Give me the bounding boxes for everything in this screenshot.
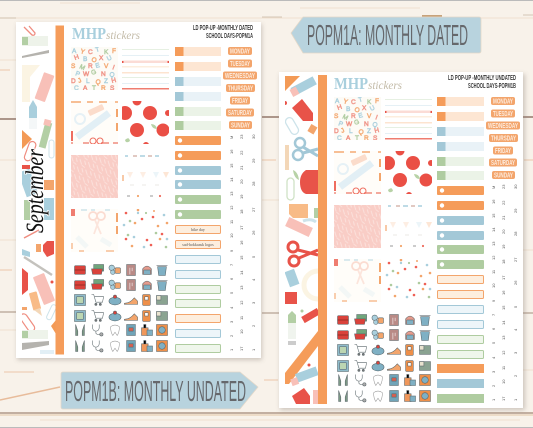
sheet 1 date numbers: 3 — [229, 320, 234, 323]
sheet 2 date numbers: 3 — [513, 351, 518, 354]
sheet 1 date numbers: 13 — [229, 191, 234, 196]
sheet 1 date numbers — [229, 134, 256, 351]
sheet 1 date numbers: 17 — [239, 346, 244, 351]
sheet 1 date numbers: 7 — [229, 263, 234, 266]
sheet 1 date numbers: 3 — [251, 301, 256, 304]
sheet 1 weekday labels: SATURDAY — [228, 110, 252, 117]
sheet 1 date numbers: 15 — [229, 163, 234, 168]
sheet 1 date numbers: 11 — [239, 315, 244, 320]
sheet 1 date numbers: 1 — [229, 348, 234, 351]
sheet 1 date numbers: 5 — [229, 291, 234, 294]
sheet 2 date numbers — [491, 184, 518, 401]
sheet 1 date numbers: 20 — [239, 179, 244, 184]
sheet 1 logo — [72, 24, 140, 43]
sheet 2 date numbers: 2 — [491, 384, 496, 387]
sheet 1 pattern tiles — [71, 46, 171, 252]
sheet 1 date numbers: 16 — [229, 149, 234, 154]
sheet 2 date numbers: 23 — [501, 184, 506, 189]
sheet 1 header text — [193, 25, 253, 40]
sheet 2 weekday labels: TUESDAY — [493, 111, 513, 118]
sheet 2 date numbers: 17 — [501, 396, 506, 401]
sheet 2 date numbers: 13 — [501, 335, 506, 340]
sheet 2 weekday labels: SUNDAY — [494, 172, 513, 180]
sheet 2 date numbers: 1 — [491, 398, 496, 401]
sheet 2 date numbers: 10 — [501, 379, 506, 384]
sheet 1 dot bars — [175, 136, 221, 219]
sheet 2 date numbers: 20 — [501, 229, 506, 234]
sheet 2 date numbers: 29 — [513, 208, 518, 213]
sheet 1 weekday labels — [223, 47, 257, 130]
sheet 2 date numbers: 7 — [491, 313, 496, 316]
sheet 1 date numbers: 14 — [229, 177, 234, 182]
sheet 1 date numbers: 19 — [239, 194, 244, 199]
sheet 1 date numbers: 10 — [229, 233, 234, 238]
sheet 1 weekday labels: MONDAY — [230, 48, 250, 56]
sheet 1 half-tab stickers — [175, 47, 221, 130]
sheet 2 date numbers: 15 — [491, 213, 496, 218]
sheet 1 date numbers: 1 — [251, 348, 256, 351]
sheet 2 weekday labels — [486, 97, 520, 180]
sheet 1 outlined boxes: sad-hokkaask logos — [182, 242, 214, 247]
sheet 1 date numbers: 27 — [251, 207, 256, 212]
sheet 1 weekday labels: TUESDAY — [230, 61, 250, 68]
sheet 2 date numbers: 18 — [501, 259, 506, 264]
sheet 1 date numbers: 4 — [251, 278, 256, 281]
sheet 2 icon grid — [338, 314, 430, 402]
sheet 1 icon grid — [74, 264, 168, 352]
sheet 1 date numbers: 12 — [239, 300, 244, 305]
sheet 2 date numbers: 14 — [491, 227, 496, 232]
sheet 2 date numbers: 12 — [491, 255, 496, 260]
sheet 2 date numbers: 2 — [513, 374, 518, 377]
sheet 2 dot bars — [437, 186, 484, 269]
sheet 1: monthly dated — [16, 22, 262, 360]
sheet 2 half-tab stickers — [437, 97, 484, 180]
sheet 1 date numbers: 28 — [251, 181, 256, 186]
sheet 1 date numbers: 17 — [239, 225, 244, 230]
sheet 1 date numbers: 21 — [239, 165, 244, 170]
sheet 2 side art — [285, 76, 318, 404]
sheet 1 header text: LD POP-UP -MONTHLY DATED — [193, 25, 253, 32]
sheet 2 date numbers: 30 — [513, 184, 518, 189]
sheet 1 date numbers: 11 — [229, 219, 234, 224]
sheet 2 date numbers: 4 — [513, 328, 518, 331]
sheet 2 date numbers: 6 — [491, 327, 496, 330]
sheet 2 date numbers: 10 — [491, 283, 496, 288]
sheet 2 date numbers: 15 — [501, 305, 506, 310]
sheet 2 date numbers: 16 — [491, 199, 496, 204]
sheet 1 outlined boxes — [176, 226, 220, 352]
sheet 1 outlined boxes: bike day — [191, 227, 205, 232]
sheet 2 date numbers: 22 — [501, 200, 506, 205]
sheet 1 date numbers: 6 — [229, 277, 234, 280]
sheet 1 date numbers: M — [229, 136, 234, 139]
sheet 1 date numbers: 10 — [239, 329, 244, 334]
label: POPM1A monthly dated — [291, 17, 481, 53]
sheet 1 date numbers: 2 — [229, 334, 234, 337]
sheet 1 date numbers: 9 — [229, 249, 234, 252]
sheet 1 logo: stickers — [106, 28, 140, 42]
sheet 1 September script: September — [22, 149, 49, 233]
sheet 2 date numbers: 11 — [501, 365, 506, 370]
sheet 2 date numbers: 4 — [491, 356, 496, 359]
sheet 1 date numbers: 18 — [239, 209, 244, 214]
sheet 2 date numbers: 1 — [513, 398, 518, 401]
sheet 2 weekday labels: THURSDAY — [491, 136, 516, 142]
sheet 1 header text: SCHOOL DAYS-POPM1A — [206, 33, 253, 40]
sheet 1 date numbers: 16 — [239, 240, 244, 245]
sheet 2 date numbers: 5 — [513, 305, 518, 308]
sheet 2 date numbers: 5 — [491, 341, 496, 344]
sheet 1 orange spine — [56, 26, 64, 354]
sheet 2 date numbers: 17 — [501, 275, 506, 280]
sheet 1 date numbers: 30 — [251, 134, 256, 139]
sheet 2 logo: stickers — [368, 78, 402, 92]
sheet 2 date numbers: 28 — [513, 231, 518, 236]
sheet 2 logo: MHP — [334, 74, 368, 93]
sheet 1 date numbers: 2 — [251, 324, 256, 327]
sheet 2 orange spine — [318, 75, 327, 404]
sheet 2 date numbers: 16 — [501, 290, 506, 295]
sheet 1 date numbers: 4 — [229, 306, 234, 309]
sheet 2 date numbers: 9 — [491, 299, 496, 302]
sheet 2: monthly undated — [279, 72, 525, 410]
sheet 1 date numbers: 23 — [239, 134, 244, 139]
sheet 1 weekday labels: WEDNESDAY — [225, 73, 255, 80]
sheet 1 date numbers: 5 — [251, 255, 256, 258]
sheet 2 date numbers: 13 — [491, 241, 496, 246]
sheet 1 weekday labels: THURSDAY — [228, 86, 253, 92]
label: POPM1B monthly undated — [61, 372, 258, 409]
sheet 2 date numbers: 3 — [491, 370, 496, 373]
sheet 2 date numbers: 12 — [501, 350, 506, 355]
sheet 2 logo — [334, 74, 402, 93]
sheet 2 outlined boxes and solid bars — [437, 276, 484, 403]
sheet 1 date numbers: 22 — [239, 150, 244, 155]
sheet 2 pattern tiles — [334, 96, 434, 302]
sheet 2 date numbers: 11 — [491, 269, 496, 274]
sheet 2 weekday labels: SATURDAY — [491, 160, 515, 167]
sheet 2 weekday labels: WEDNESDAY — [488, 123, 518, 130]
sheet 2 weekday labels: FRIDAY — [495, 148, 511, 155]
sheet 2 date numbers: 26 — [513, 280, 518, 285]
sheet 1 weekday labels: SUNDAY — [231, 122, 250, 130]
sheet 2 weekday labels: MONDAY — [493, 98, 513, 106]
sheet 2 header text — [448, 75, 516, 90]
sheet 2 date numbers: M — [491, 186, 496, 189]
sheet 2 date numbers: 27 — [513, 257, 518, 262]
text: POPM1B: MONTHLY UNDATED — [65, 376, 246, 408]
sheet 1 date numbers: 26 — [251, 230, 256, 235]
sheet 2 date numbers: 21 — [501, 215, 506, 220]
sheet 1 date numbers: 13 — [239, 285, 244, 290]
sheet 1 side art — [22, 26, 56, 354]
sheet 1 logo: MHP — [72, 24, 106, 43]
sheet 1 weekday labels: FRIDAY — [232, 98, 248, 105]
sheet 1 date numbers: 29 — [251, 158, 256, 163]
sheet 2 date numbers: 14 — [501, 320, 506, 325]
sheet 1 date numbers: 12 — [229, 205, 234, 210]
sheet 1 date numbers: 15 — [239, 255, 244, 260]
sheet 1 date numbers: 14 — [239, 270, 244, 275]
sheet 2 date numbers: 19 — [501, 244, 506, 249]
